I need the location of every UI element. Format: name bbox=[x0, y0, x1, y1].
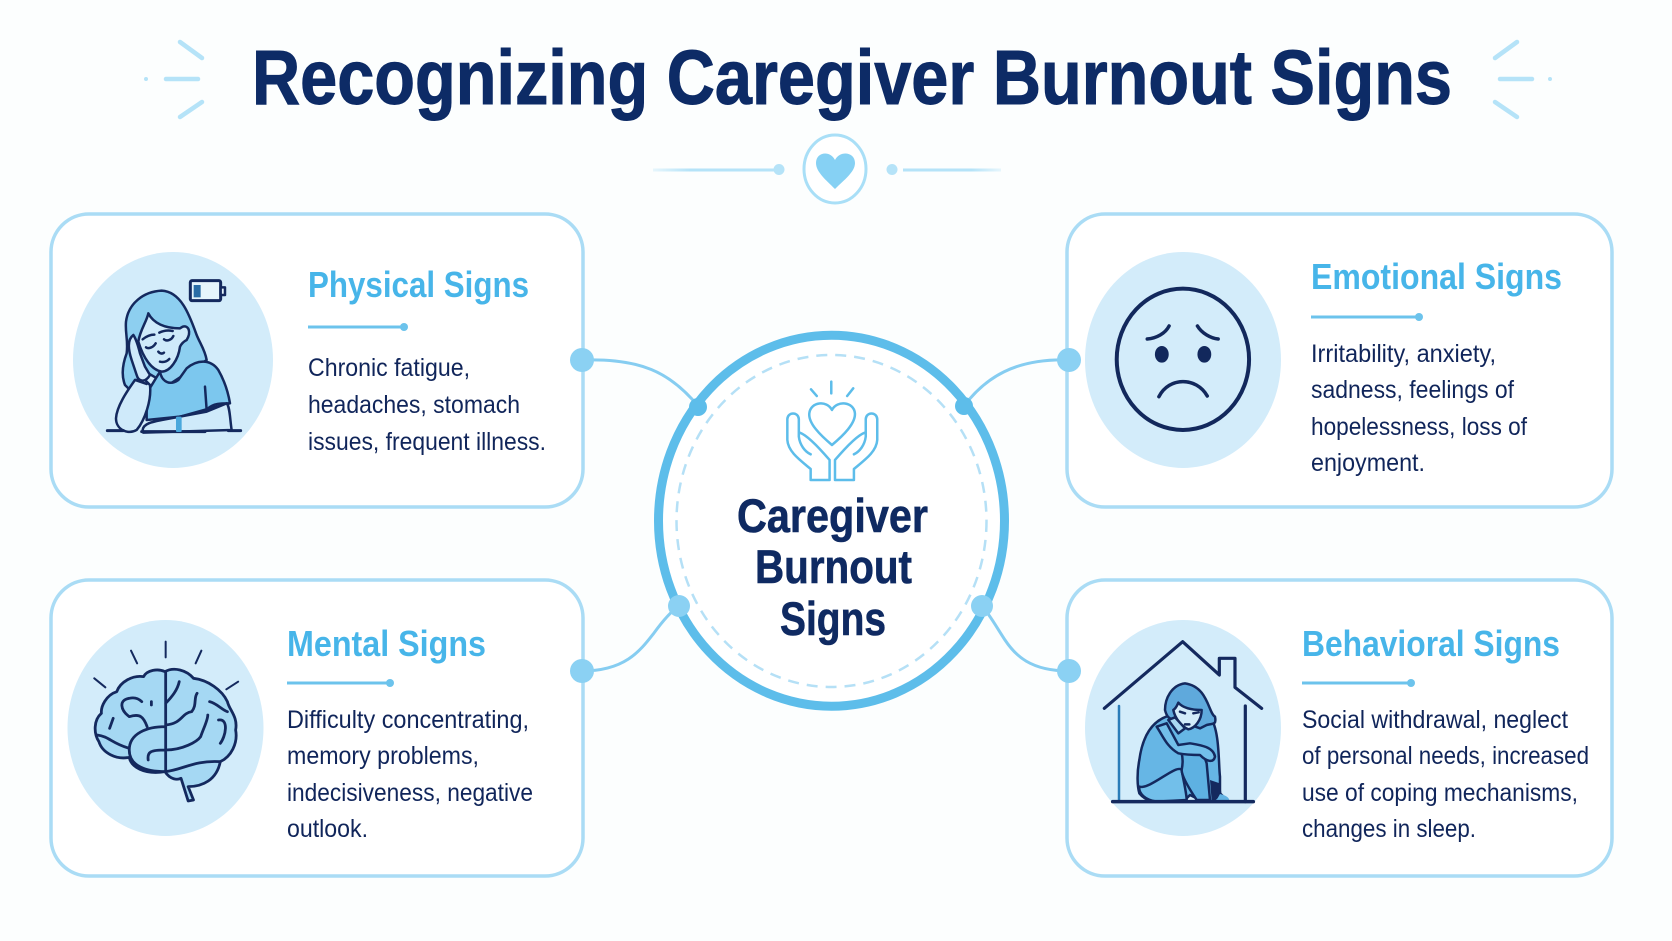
heading rule bbox=[308, 323, 408, 331]
heart divider bbox=[653, 135, 1001, 203]
body: emotional signs: hopelessness, loss of bbox=[1311, 413, 1527, 441]
hub label: Caregiver bbox=[737, 489, 928, 542]
body: behavioral signs: Social withdrawal, neglect bbox=[1302, 706, 1568, 734]
icon: brain bbox=[68, 620, 264, 836]
icon: left title sparkle bbox=[144, 42, 202, 117]
panel: emotional signs bbox=[1067, 214, 1612, 507]
heading: behavioral signs: Behavioral Signs bbox=[1302, 623, 1560, 664]
panel: physical signs bbox=[51, 214, 583, 507]
body: physical signs: Chronic fatigue, bbox=[308, 354, 470, 382]
body: emotional signs bbox=[1311, 340, 1527, 477]
hub ring bbox=[658, 335, 1004, 706]
connector nodes bbox=[570, 348, 1081, 683]
icon: sad face bbox=[1085, 252, 1281, 468]
central hub bbox=[658, 335, 1004, 706]
icon: right title sparkle bbox=[1495, 42, 1552, 117]
connectors from panels to centre hub bbox=[582, 360, 1069, 671]
heading: mental signs: Mental Signs bbox=[287, 623, 486, 664]
body: physical signs: headaches, stomach bbox=[308, 391, 520, 419]
title: Recognizing Caregiver Burnout Signs bbox=[252, 35, 1452, 121]
body: mental signs: Difficulty concentrating, bbox=[287, 706, 529, 734]
icon: person hugging knees inside house bbox=[1085, 620, 1281, 836]
body: physical signs bbox=[308, 354, 546, 456]
panel: behavioral signs bbox=[1067, 580, 1612, 876]
body: physical signs: issues, frequent illness. bbox=[308, 428, 546, 456]
hub label: Signs bbox=[780, 592, 886, 645]
icon: hands holding heart bbox=[787, 382, 877, 480]
panel: mental signs bbox=[51, 580, 583, 876]
body: mental signs bbox=[287, 706, 533, 843]
hub dashed ring bbox=[676, 355, 986, 687]
heading: emotional signs: Emotional Signs bbox=[1311, 256, 1562, 297]
body: mental signs: memory problems, bbox=[287, 742, 479, 770]
icon: tired woman with low battery bbox=[73, 252, 273, 468]
body: behavioral signs: changes in sleep. bbox=[1302, 815, 1476, 843]
body: emotional signs: sadness, feelings of bbox=[1311, 376, 1514, 404]
hub label bbox=[737, 489, 928, 645]
body: emotional signs: enjoyment. bbox=[1311, 449, 1425, 477]
body: emotional signs: Irritability, anxiety, bbox=[1311, 340, 1496, 368]
body: mental signs: indecisiveness, negative bbox=[287, 779, 533, 807]
heading rule bbox=[1311, 313, 1423, 321]
heading rule bbox=[287, 679, 394, 687]
body: behavioral signs: use of coping mechanisms, bbox=[1302, 779, 1578, 807]
heading: physical signs: Physical Signs bbox=[308, 264, 529, 305]
hub label: Burnout bbox=[755, 540, 912, 593]
body: mental signs: outlook. bbox=[287, 815, 368, 843]
body: behavioral signs bbox=[1302, 706, 1589, 843]
body: behavioral signs: of personal needs, increased bbox=[1302, 742, 1589, 770]
heading rule bbox=[1302, 679, 1415, 687]
